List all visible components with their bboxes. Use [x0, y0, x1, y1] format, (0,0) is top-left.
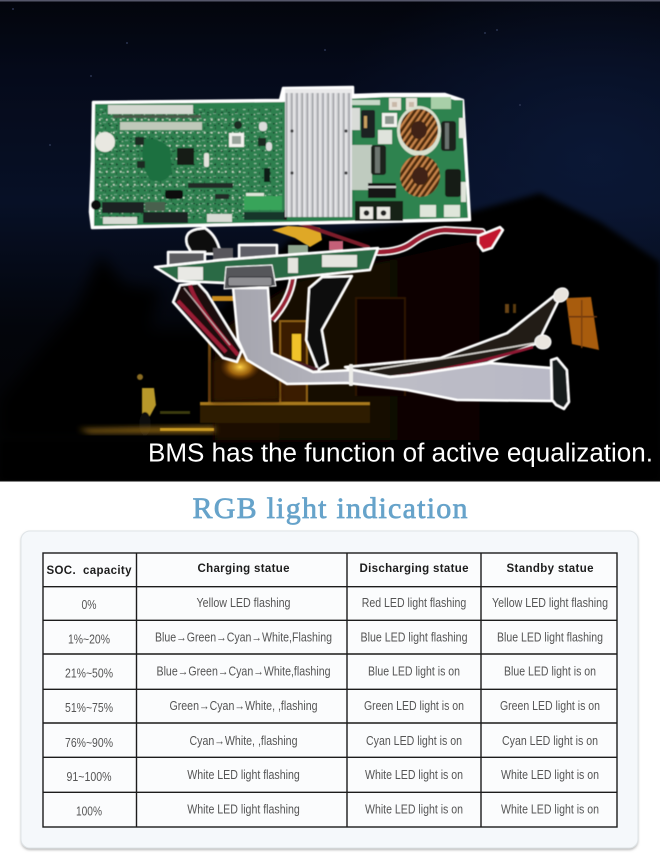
lit porch frame and columns [200, 296, 370, 423]
ribbon end connector [551, 358, 569, 409]
red and black wires behind ribbon [272, 353, 318, 378]
upper window glow [272, 226, 322, 247]
table row: 91~100%: 91~100% [66, 770, 112, 784]
table row: 21%~50% [65, 664, 596, 680]
table row: 51%~75% [65, 699, 600, 715]
table row: 0%: Red LED light flashing [362, 596, 466, 610]
table row: 100%: 100% [76, 804, 102, 818]
heatsink [285, 89, 352, 95]
lit window [505, 297, 599, 350]
table: RGB light states by SOC capacity [43, 553, 617, 827]
black wire bundle [306, 276, 352, 370]
table row: 51%~75%: Green LED light is on [500, 699, 600, 713]
table row: 91~100%: White LED light flashing [187, 768, 300, 782]
dark green plane [142, 139, 172, 181]
table row: 76%~90%: Cyan LED light is on [502, 734, 598, 748]
stars [12, 8, 521, 146]
table row: 51%~75%: 51%~75% [65, 701, 113, 715]
table row: 51%~75%: Green LED light is on [364, 699, 464, 713]
caption: active equalization: BMS has the function of active equalization. [148, 440, 653, 468]
capacitors [441, 121, 456, 151]
table row: 76%~90%: Cyan LED light is on [366, 734, 462, 748]
connectors top [108, 105, 193, 114]
QR labels [229, 133, 244, 147]
photo: BMS circuit boards and cabling [90, 87, 571, 409]
tree silhouettes [0, 255, 230, 440]
table row: 0% [82, 596, 608, 612]
table row: 51%~75%: Green→Cyan→White, ,flashing [170, 699, 318, 713]
table row: 21%~50%: 21%~50% [65, 666, 113, 680]
table header row: Standby statue [506, 563, 594, 575]
table row: 100%: White LED light flashing [187, 802, 300, 816]
house door frame [356, 298, 405, 396]
table row: 0%: Yellow LED light flashing [492, 596, 608, 610]
table header row: Charging statue [198, 563, 290, 575]
table row: 0%: Yellow LED flashing [196, 596, 291, 610]
title: RGB light indication: RGB light indication [192, 492, 468, 525]
table row: 0%: 0% [82, 598, 96, 612]
red wire to ring terminal [287, 219, 482, 252]
table row: 91~100% [66, 768, 599, 784]
table row: 21%~50%: Blue LED light is on [504, 664, 596, 678]
lit ground [78, 426, 215, 433]
table header row [46, 563, 594, 577]
table row: 76%~90%: 76%~90% [65, 736, 113, 750]
scooter [137, 374, 156, 436]
table row: 21%~50%: Blue LED light is on [368, 664, 460, 678]
centre red wire [272, 278, 293, 320]
ring terminal [478, 227, 503, 251]
table row: 100%: White LED light is on [501, 802, 599, 816]
panel: table card [21, 531, 638, 850]
table row: 1%~20%: Blue LED light flashing [360, 630, 468, 644]
table row: 100% [76, 802, 599, 818]
table row: 1%~20%: Blue→Green→Cyan→White,Flashing [155, 630, 332, 644]
cable tie [349, 364, 353, 386]
lower interface board [155, 228, 378, 289]
main PCB with heatsink [90, 87, 470, 228]
main chip [177, 148, 194, 165]
table row: 21%~50%: Blue→Green→Cyan→White,flashing [156, 664, 331, 678]
left red wire loop [173, 283, 242, 362]
table row: 100%: White LED light is on [365, 802, 463, 816]
connectors right [389, 98, 401, 110]
table header row: SOC. capacity [46, 565, 132, 577]
table row: 1%~20% [68, 630, 603, 646]
table row: 1%~20%: Blue LED light flashing [497, 630, 603, 644]
table header row: Discharging statue [360, 563, 468, 575]
grey ribbon cable [233, 288, 552, 401]
photo background: night house scene [0, 0, 660, 481]
table row: 76%~90%: Cyan→White, ,flashing [190, 734, 298, 748]
table row: 76%~90% [65, 734, 598, 750]
table row: 91~100%: White LED light is on [501, 768, 599, 782]
porch light glow [220, 353, 260, 381]
bottom connectors [103, 217, 137, 224]
circuit detail texture [96, 108, 284, 220]
toroid inductors [397, 106, 441, 156]
wire bundle to white plugs [345, 285, 571, 378]
table row: 1%~20%: 1%~20% [68, 632, 110, 646]
table row: 91~100%: White LED light is on [365, 768, 463, 782]
house silhouette [0, 193, 660, 481]
power stage parts [352, 100, 380, 105]
battery [95, 132, 115, 152]
lit wall under the porch [212, 340, 280, 402]
white lower section [0, 481, 660, 857]
